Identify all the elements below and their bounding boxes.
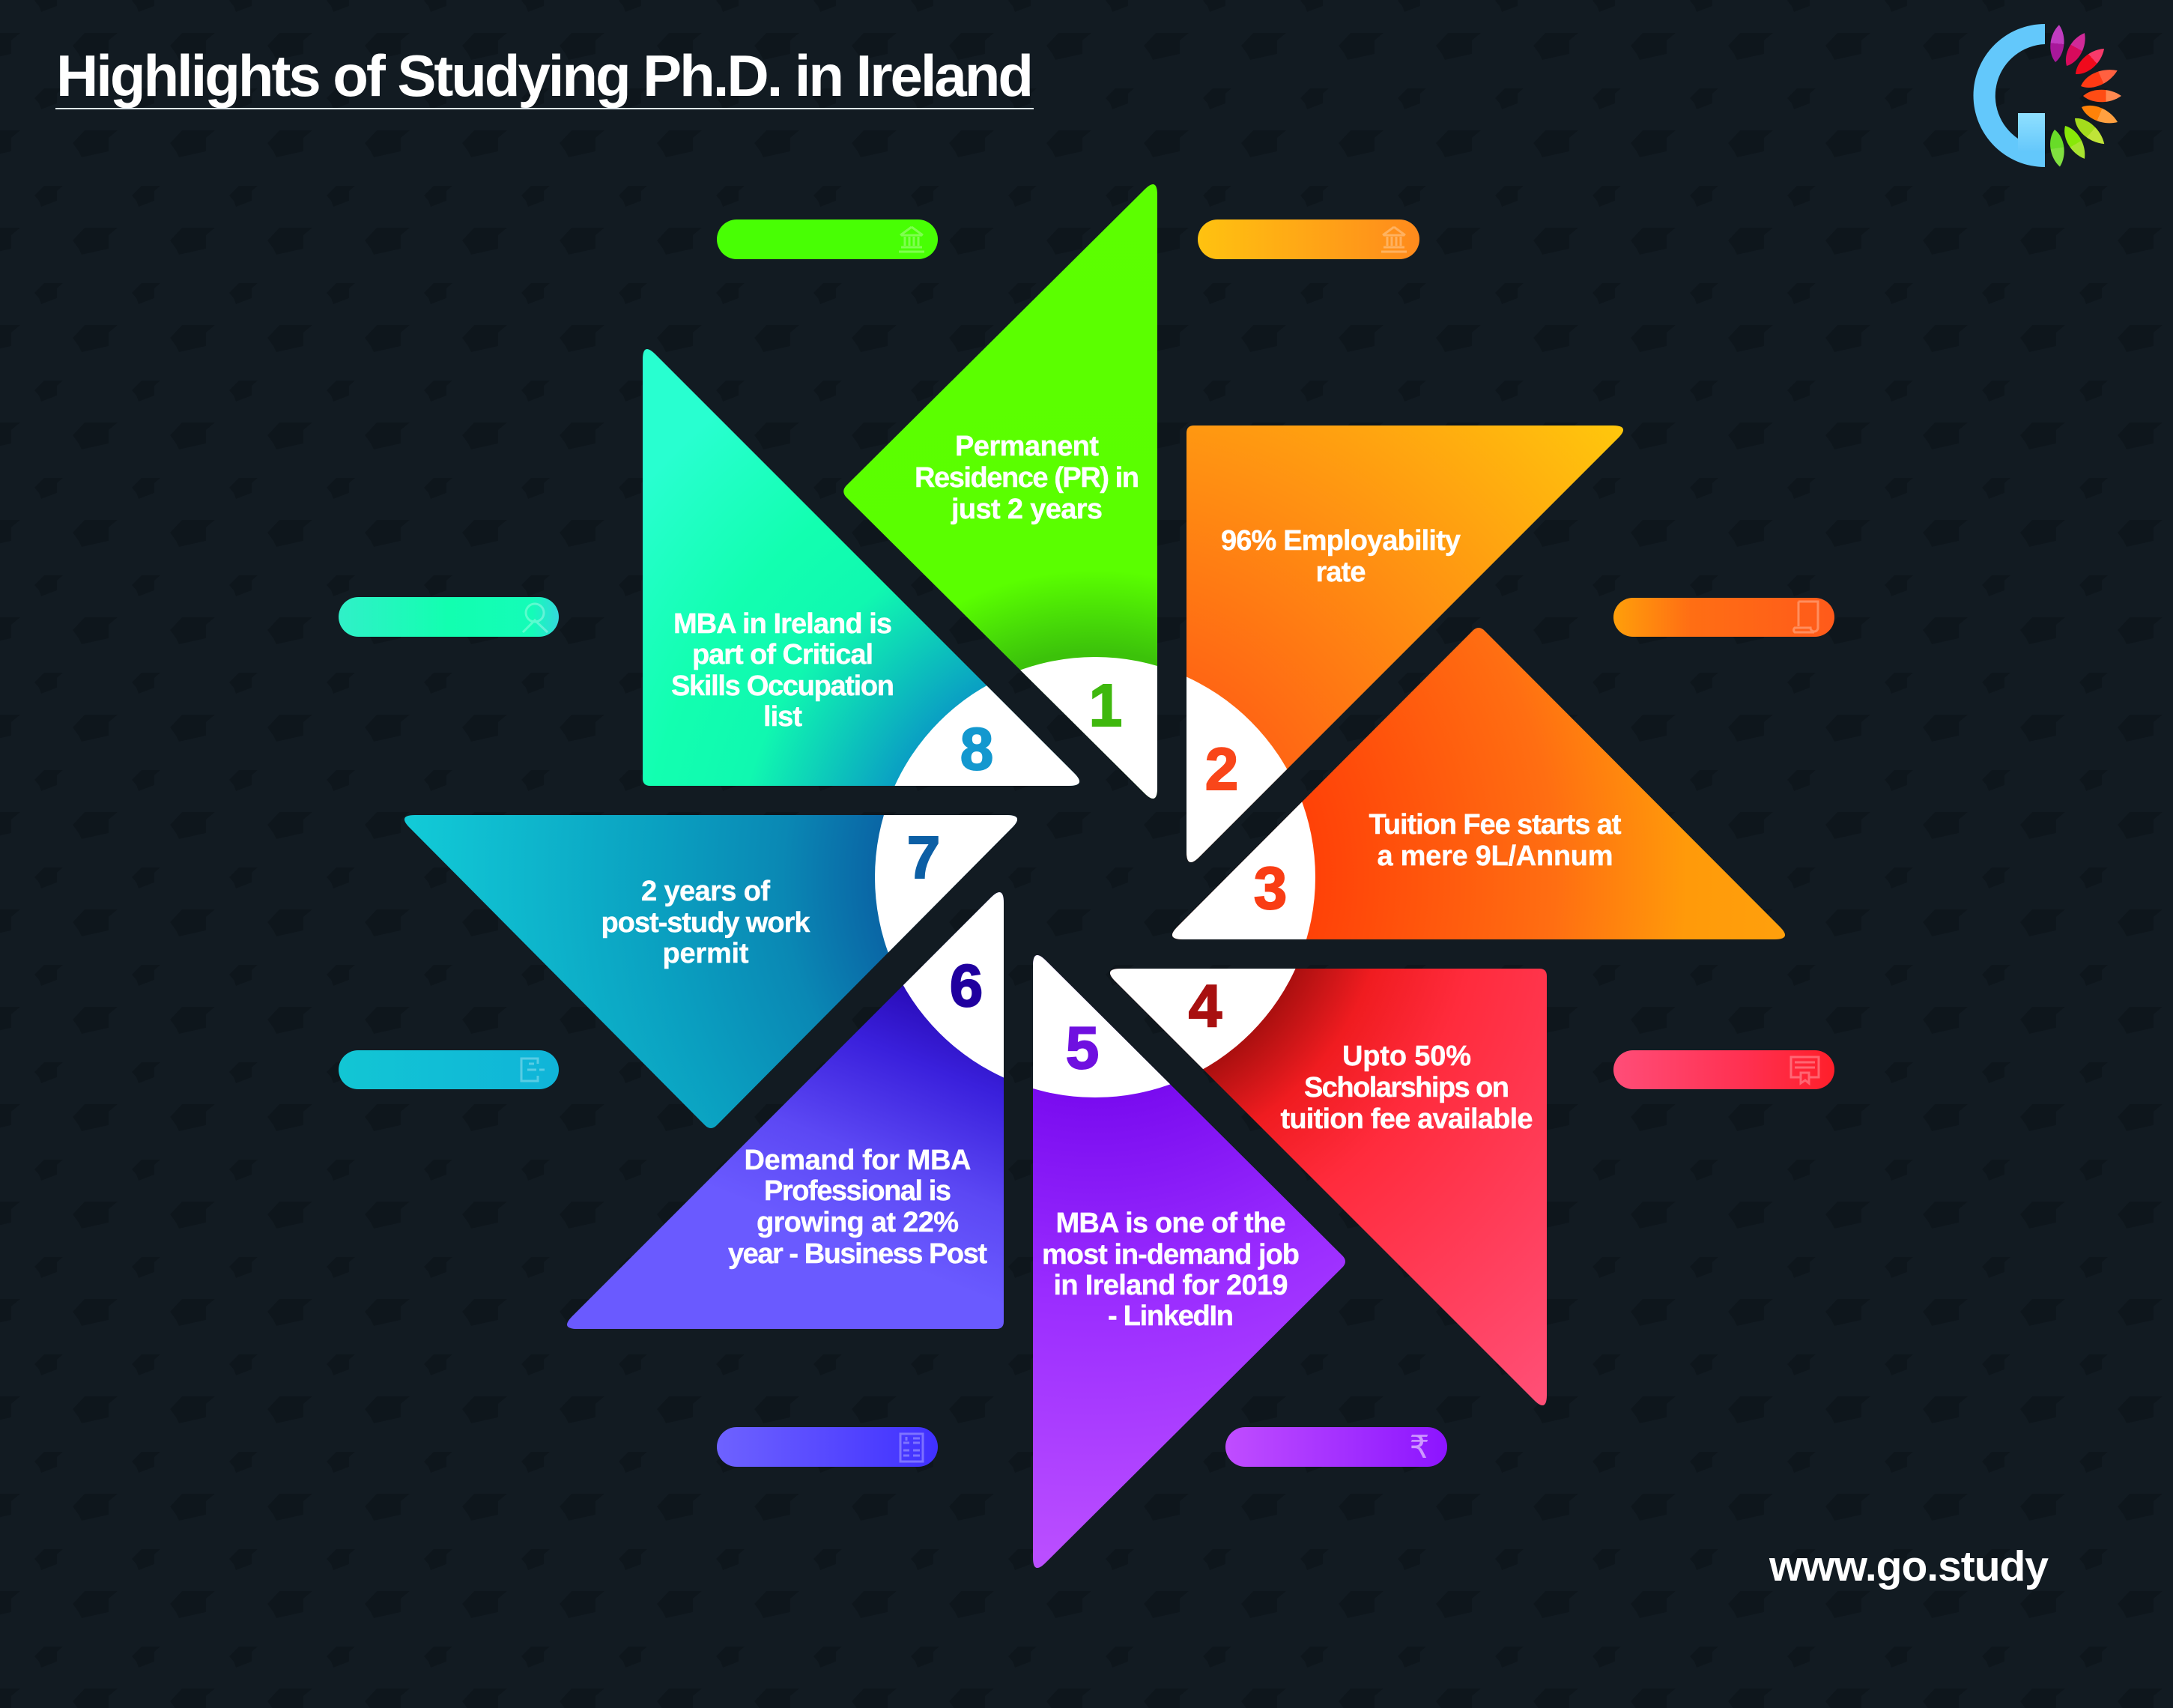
text 5: - LinkedIn xyxy=(1108,1300,1234,1332)
triangle 7 with white hub segment xyxy=(404,815,1017,1128)
pill 3 with scroll icon xyxy=(1613,598,1834,637)
text 3: a mere 9L/Annum xyxy=(1377,841,1613,872)
pill 1 with institution icon xyxy=(717,219,938,259)
text 7 xyxy=(601,876,810,969)
website url: www.go.study xyxy=(1769,1542,2049,1590)
text 4: Upto 50% xyxy=(1342,1041,1471,1072)
panel 8: critical skills xyxy=(643,349,1080,786)
number 5: 5 xyxy=(1066,1014,1099,1081)
triangle 4 with white hub segment xyxy=(1110,969,1547,1405)
panel 2: employability xyxy=(1186,426,1624,862)
title: Highlights of Studying Ph.D. in Ireland xyxy=(56,43,1034,109)
triangle 8 with white hub segment xyxy=(643,349,1080,786)
number 6: 6 xyxy=(950,952,983,1019)
triangle 2 with white hub segment xyxy=(1186,426,1624,862)
text 6: Professional is xyxy=(764,1175,951,1207)
text 8: MBA in Ireland is xyxy=(673,608,892,640)
number 7: 7 xyxy=(907,824,940,891)
triangle 1 with white hub segment xyxy=(843,184,1157,799)
text 1: Permanent xyxy=(955,431,1099,462)
text 6: year - Business Post xyxy=(728,1238,987,1270)
pill 5 with rupee icon: ₹ xyxy=(1410,1429,1429,1465)
text 8: list xyxy=(763,701,802,733)
text 1: Residence (PR) in xyxy=(915,462,1139,494)
pill 5 with rupee icon xyxy=(1225,1427,1447,1467)
text 7: post-study work xyxy=(601,907,810,939)
text 2: 96% Employability xyxy=(1221,525,1461,557)
text 7: 2 years of xyxy=(641,876,770,907)
text 8 xyxy=(671,608,894,733)
text 8: Skills Occupation xyxy=(671,670,894,702)
triangle 5 with white hub segment xyxy=(1033,955,1345,1568)
panel 6: demand growth xyxy=(566,892,1004,1329)
panel 4: scholarships xyxy=(1110,969,1547,1405)
text 5: in Ireland for 2019 xyxy=(1053,1270,1288,1301)
text 2 xyxy=(1221,525,1461,588)
logo xyxy=(1973,24,2121,168)
pill 2 with institution icon xyxy=(1198,219,1419,259)
text 6: growing at 22% xyxy=(757,1207,959,1238)
text 6 xyxy=(728,1145,987,1270)
pill 6 with id card icon xyxy=(717,1427,938,1467)
triangle 3 with white hub segment xyxy=(1172,628,1785,939)
text 4: tuition fee available xyxy=(1281,1103,1533,1135)
text 5: MBA is one of the xyxy=(1056,1208,1285,1239)
panel 5: in-demand job xyxy=(1033,955,1345,1568)
pill 8 with person icon xyxy=(339,597,559,637)
panel 1: permanent residence xyxy=(843,184,1157,799)
text 3: Tuition Fee starts at xyxy=(1369,809,1622,841)
triangle 6 with white hub segment xyxy=(566,892,1004,1329)
text 4 xyxy=(1281,1041,1533,1135)
number 1: 1 xyxy=(1089,672,1122,739)
pill 7 with exit icon xyxy=(339,1050,559,1089)
number 8: 8 xyxy=(960,715,993,782)
text 1 xyxy=(915,431,1139,525)
text 5: most in-demand job xyxy=(1042,1239,1300,1271)
number 2: 2 xyxy=(1205,736,1238,802)
text 1: just 2 years xyxy=(951,494,1103,525)
text 3 xyxy=(1369,809,1622,872)
text 8: part of Critical xyxy=(692,639,873,670)
panel 3: tuition fee xyxy=(1172,628,1785,939)
text 5 xyxy=(1042,1208,1300,1332)
panel 7: work permit xyxy=(404,815,1017,1128)
text 4: Scholarships on xyxy=(1304,1072,1509,1103)
pill 4 with certificate icon xyxy=(1613,1050,1834,1089)
text 6: Demand for MBA xyxy=(745,1145,971,1176)
number 4: 4 xyxy=(1189,972,1222,1039)
text 2: rate xyxy=(1315,557,1366,588)
number 3: 3 xyxy=(1254,855,1287,921)
text 7: permit xyxy=(662,938,749,969)
